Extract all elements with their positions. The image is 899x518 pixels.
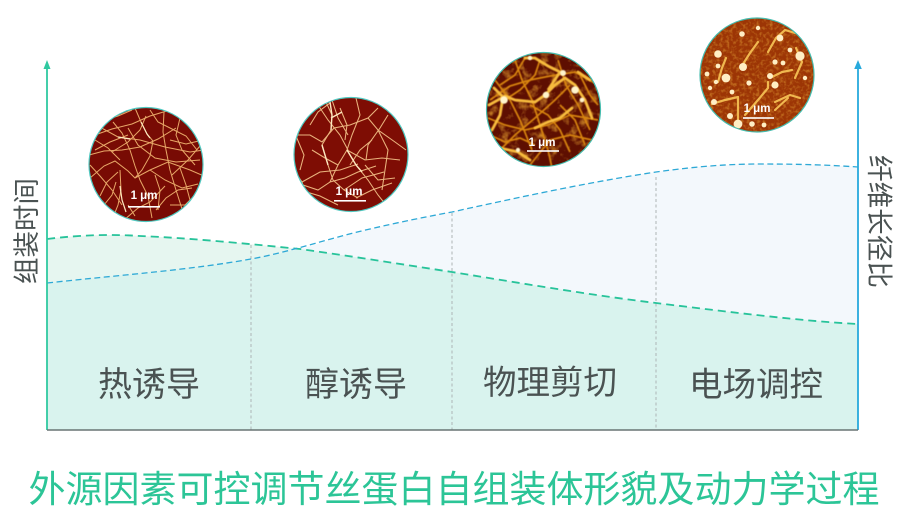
- scale bar 2: 1 μm: [336, 186, 362, 198]
- chart: area fills: [47, 164, 858, 430]
- micrograph 1: heat induced: [89, 108, 204, 222]
- title: 外源因素可控调节丝蛋白自组装体形貌及动力学过程: [28, 459, 880, 513]
- micrograph 3: physical shearing: [486, 52, 601, 168]
- scale bar 4: 1 μm: [744, 103, 770, 115]
- stage label: heat induced: 热诱导: [98, 357, 200, 406]
- stage dividers: [251, 177, 656, 430]
- stage label: alcohol induced: 醇诱导: [305, 357, 407, 406]
- axis: baseline: [47, 429, 858, 431]
- curve: assembly time (green dashed): [47, 235, 858, 324]
- stage label: physical shearing: 物理剪切: [483, 355, 617, 404]
- axis: right blue arrow: [854, 60, 862, 430]
- scale bar 1: 1 μm: [131, 190, 157, 202]
- axis: left green arrow: [44, 60, 50, 430]
- left axis label: 组装时间: [5, 178, 44, 284]
- micrograph 2: alcohol induced: [294, 98, 408, 212]
- stage label: electric field control: 电场调控: [689, 357, 823, 406]
- curve: fibre aspect ratio (blue dashed): [47, 164, 858, 283]
- scale bar 3: 1 μm: [529, 137, 555, 149]
- micrograph 4: electric field: [700, 18, 814, 132]
